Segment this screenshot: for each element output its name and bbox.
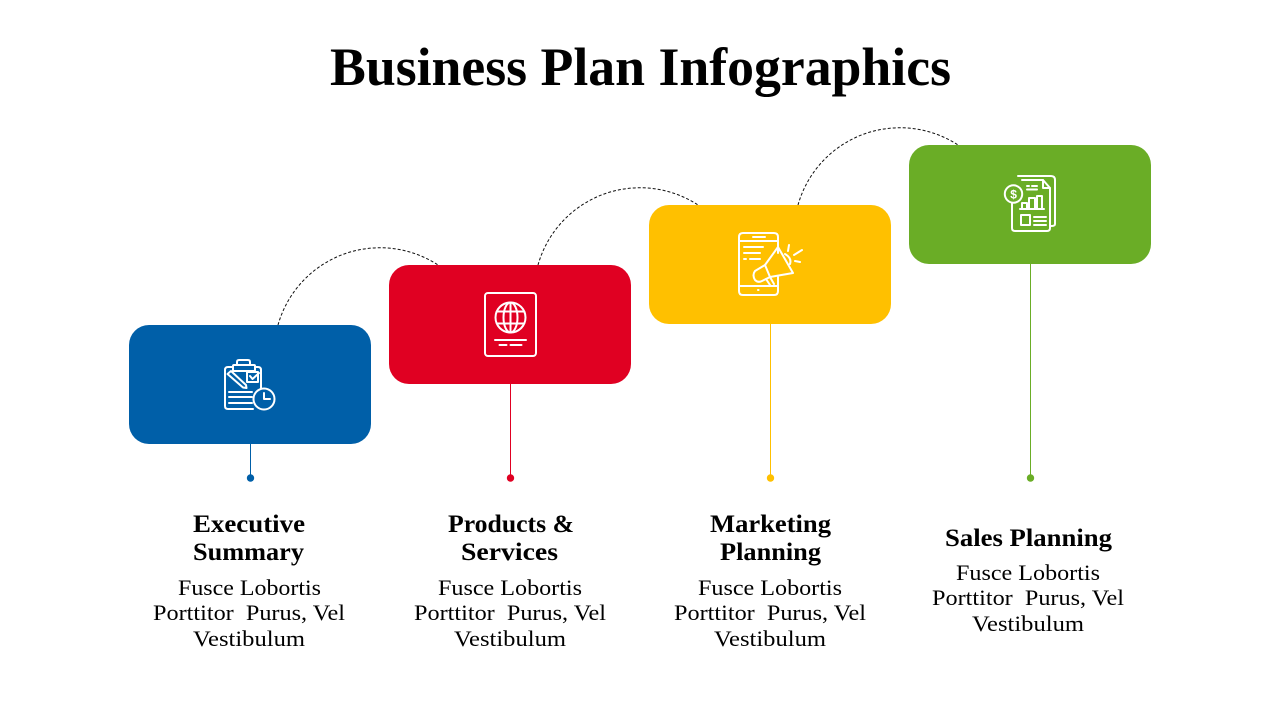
panel: sales planning <box>909 145 1151 636</box>
text: sales planning description <box>932 560 1124 636</box>
panel: marketing planning <box>649 205 891 651</box>
text: marketing planning description: Porttitor Purus, Vel <box>674 600 866 625</box>
connector and dot: products and services <box>507 380 514 482</box>
icon: financial report with dollar coin: $ <box>1010 187 1017 201</box>
arrow: dashed arc from blue card to red card <box>278 248 438 325</box>
card: executive summary <box>129 325 371 444</box>
heading: products and services: Products & <box>448 511 574 538</box>
card: sales planning <box>909 145 1151 264</box>
heading: sales planning: Sales Planning <box>945 525 1113 552</box>
text: marketing planning description <box>674 575 866 651</box>
connector and dot: executive summary <box>247 440 254 482</box>
panel: products and services <box>389 265 631 651</box>
text: executive summary description: Vestibulum <box>193 626 306 651</box>
text: executive summary description <box>153 575 345 651</box>
text: products and services description: Porttitor Purus, Vel <box>414 600 606 625</box>
arrow: dashed arc from red card to yellow card <box>538 188 698 265</box>
text: marketing planning description: Vestibulum <box>714 626 827 651</box>
text: sales planning description: Fusce Lobortis <box>956 560 1100 585</box>
heading: products and services: Services <box>461 539 558 566</box>
heading: executive summary: Executive <box>193 511 305 538</box>
text: products and services description: Fusce Lobortis <box>438 575 582 600</box>
card: marketing planning <box>649 205 891 324</box>
heading: executive summary <box>193 511 305 566</box>
title: Business Plan Infographics <box>330 37 951 97</box>
text: products and services description: Vestibulum <box>454 626 567 651</box>
card: products and services <box>389 265 631 384</box>
icon: clipboard with clock <box>225 360 274 410</box>
text: products and services description <box>414 575 606 651</box>
connector and dot: sales planning <box>1027 260 1034 482</box>
arrow: dashed arc from yellow card to green card <box>798 128 958 205</box>
heading: marketing planning: Marketing <box>710 511 832 538</box>
heading: products and services <box>448 511 574 566</box>
text: sales planning description: Vestibulum <box>972 611 1085 636</box>
icon: phone with megaphone <box>739 233 802 295</box>
icon: passport with globe <box>485 293 536 356</box>
text: marketing planning description: Fusce Lobortis <box>698 575 842 600</box>
heading: marketing planning: Planning <box>720 539 822 566</box>
text: executive summary description: Fusce Lobortis <box>178 575 321 600</box>
heading: executive summary: Summary <box>193 539 305 566</box>
icon: financial report with dollar coin <box>1005 176 1055 231</box>
heading: marketing planning <box>710 511 832 566</box>
text: executive summary description: Porttitor Purus, Vel <box>153 600 345 625</box>
text: sales planning description: Porttitor Purus, Vel <box>932 585 1124 610</box>
connector and dot: marketing planning <box>767 320 774 482</box>
panel: executive summary <box>129 325 371 651</box>
